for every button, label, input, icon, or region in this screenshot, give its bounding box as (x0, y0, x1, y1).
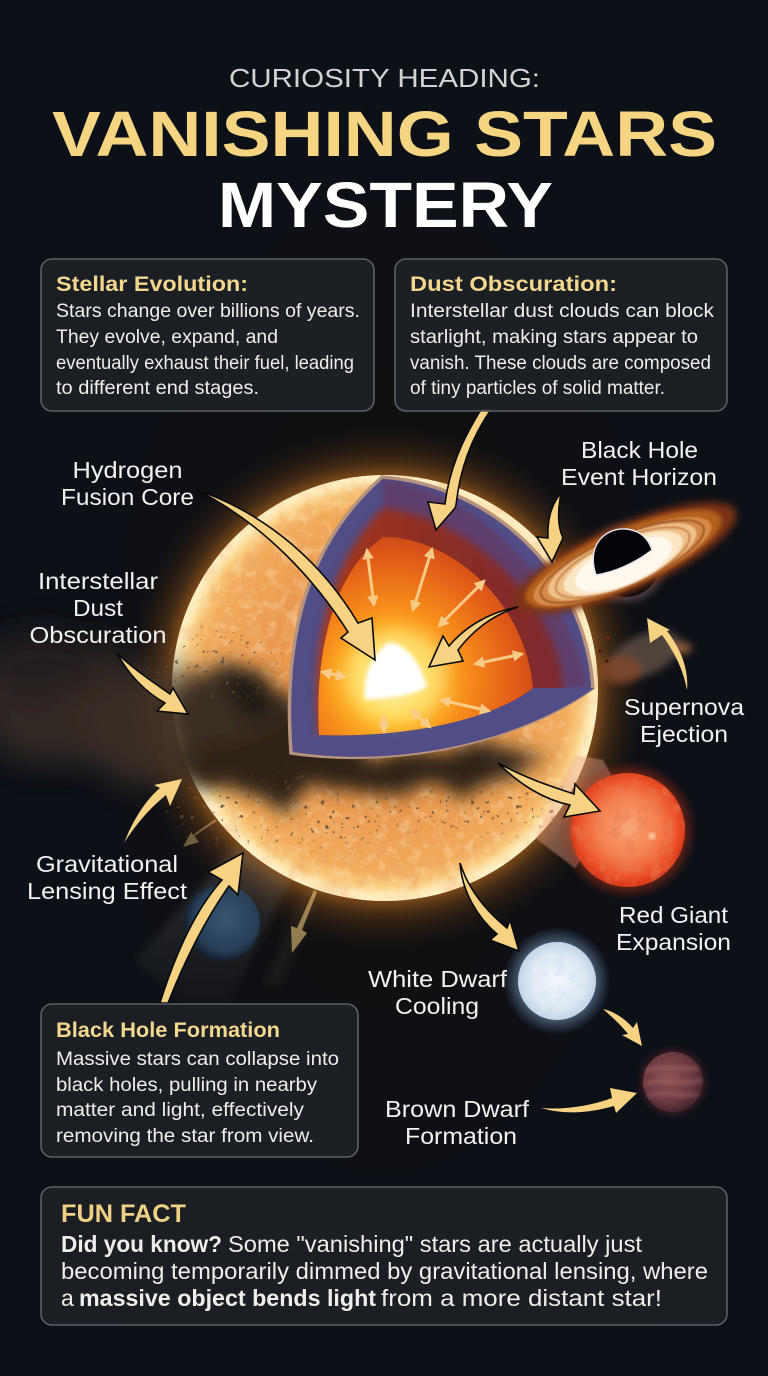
panel: black hole formation: Massive stars can collapse into (56, 1049, 339, 1070)
arrow: black hole event horizon (537, 493, 563, 562)
main star glow (123, 426, 647, 950)
bottom purple face (293, 688, 594, 757)
cutaway stellar interior (289, 477, 594, 757)
panel: stellar evolution (41, 259, 374, 411)
panel: fun fact: FUN FACT (61, 1200, 186, 1228)
panel: fun fact: massive object bends light (79, 1285, 376, 1311)
panel: stellar evolution: They evolve, expand, and (56, 327, 278, 348)
arrow: core from disk (429, 607, 518, 667)
panel: dust obscuration: of tiny particles of solid matter. (410, 378, 665, 399)
panel: black hole formation (41, 1004, 358, 1157)
label: red giant expansion: Red Giant (619, 902, 729, 928)
arrow: white dwarf to brown dwarf (603, 1009, 642, 1046)
arrow: brown dwarf (541, 1088, 637, 1113)
panel: dust obscuration: Interstellar dust clouds can block (410, 301, 715, 322)
panel: fun fact: from a more distant star! (381, 1285, 662, 1311)
arrow: red giant (498, 763, 600, 817)
label: white dwarf cooling: Cooling (395, 993, 479, 1019)
panel: black hole formation: removing the star from view. (56, 1126, 314, 1147)
panel: dust obscuration: Dust Obscuration: (410, 273, 617, 296)
title block (52, 63, 717, 241)
panel: black hole formation: matter and light, effectively (56, 1100, 305, 1121)
label: white dwarf cooling: White Dwarf (368, 966, 508, 992)
label: black hole event horizon: Event Horizon (561, 464, 717, 490)
arrow: hydrogen fusion core (197, 490, 375, 660)
label: supernova ejection (624, 694, 744, 747)
panel: fun fact: Some "vanishing" stars are actually just (228, 1231, 643, 1257)
interstellar dust cloud (0, 622, 572, 859)
brown dwarf (635, 1044, 711, 1120)
label: white dwarf cooling (368, 966, 508, 1019)
arrow: dust obscuration (428, 408, 492, 530)
lensing light beams and distant planet (135, 846, 320, 1030)
label: supernova ejection: Ejection (640, 721, 728, 747)
shaded upper face of envelope (382, 480, 588, 688)
label: black hole event horizon: Black Hole (581, 437, 698, 463)
label: black hole event horizon (561, 437, 717, 490)
arrow: supernova ejection (647, 618, 687, 690)
arrow: interstellar dust obscuration (117, 653, 188, 714)
arrow: black hole formation (160, 853, 243, 1003)
arrow: white dwarf (460, 863, 519, 951)
label: gravitational lensing effect (27, 851, 188, 904)
white dwarf star (503, 927, 611, 1035)
outer purple envelope (289, 477, 593, 757)
energy flow arrows (322, 549, 522, 732)
panel: stellar evolution: Stellar Evolution: (56, 273, 248, 296)
black hole with accretion disk (502, 481, 749, 635)
label: red giant expansion (616, 902, 731, 955)
panel: fun fact: Did you know? (61, 1231, 222, 1257)
icon: distant blue planet (184, 885, 260, 961)
label: gravitational lensing effect: Gravitational (36, 851, 178, 877)
label: gravitational lensing effect: Lensing Effect (27, 878, 188, 904)
panel: dust obscuration: vanish. These clouds are composed (410, 353, 711, 374)
panel: fun fact: becoming temporarily dimmed by gravitational lensing, where (61, 1258, 708, 1284)
panel: stellar evolution: to different end stages. (56, 378, 259, 399)
sun sphere with granulated surface (172, 475, 598, 901)
label: interstellar dust obscuration: Interstellar (38, 568, 158, 594)
panel: stellar evolution: eventually exhaust their fuel, leading (56, 353, 354, 374)
supernova ejecta debris (598, 621, 692, 689)
convective zone (318, 537, 533, 735)
panel: fun fact (41, 1187, 727, 1325)
label: hydrogen fusion core: Fusion Core (61, 484, 194, 510)
main title line two: MYSTERY (218, 169, 553, 241)
red giant star (535, 755, 698, 900)
label: interstellar dust obscuration (30, 568, 166, 648)
glowing hydrogen core (365, 643, 427, 700)
icon: event horizon (593, 529, 652, 575)
kicker heading: CURIOSITY HEADING: (229, 63, 540, 93)
label: brown dwarf formation: Formation (405, 1123, 517, 1149)
label: supernova ejection: Supernova (624, 694, 744, 720)
radiative zone (316, 508, 564, 738)
label: brown dwarf formation: Brown Dwarf (385, 1096, 530, 1122)
faded lensing arrows (183, 819, 317, 953)
panel: fun fact: a (61, 1285, 74, 1311)
panel: black hole formation: Black Hole Formation (56, 1019, 280, 1042)
label: hydrogen fusion core: Hydrogen (72, 457, 182, 483)
arrow: gravitational lensing (124, 779, 182, 843)
label: red giant expansion: Expansion (616, 929, 731, 955)
label: hydrogen fusion core (61, 457, 194, 510)
main title line one: VANISHING STARS (52, 98, 717, 170)
panel: dust obscuration: starlight, making stars appear to (410, 327, 698, 348)
panel: black hole formation: black holes, pulling in nearby (56, 1075, 318, 1096)
label: interstellar dust obscuration: Obscuration (30, 622, 166, 648)
label: interstellar dust obscuration: Dust (73, 595, 124, 621)
label: brown dwarf formation (385, 1096, 530, 1149)
panel: dust obscuration (395, 259, 727, 411)
panel: stellar evolution: Stars change over billions of years. (56, 301, 360, 322)
